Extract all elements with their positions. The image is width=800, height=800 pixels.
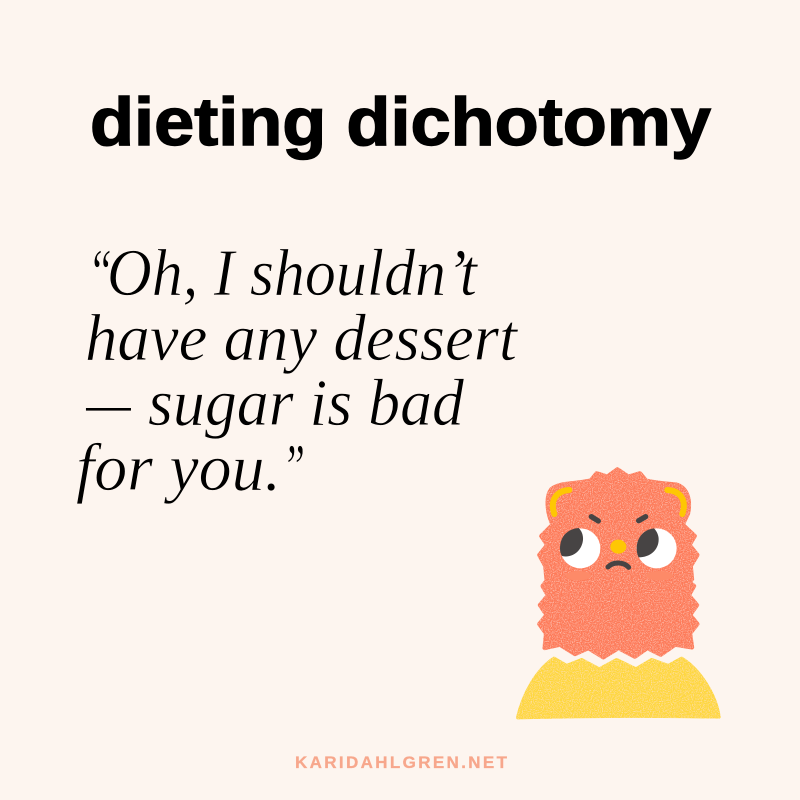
icon: grumpy orange monster — [518, 469, 719, 717]
monster orange fur — [539, 469, 697, 657]
quote text: have any dessert — [85, 301, 518, 375]
footer website: KARIDAHLGREN.NET — [295, 753, 508, 772]
quote text: sugar is bad — [148, 366, 464, 440]
monster yellow body — [518, 659, 719, 717]
quote text: Oh, I shouldn’t — [107, 236, 478, 310]
quote text: for you. — [76, 431, 281, 505]
nose — [610, 540, 626, 554]
quote text: ” — [282, 431, 305, 505]
quote text — [76, 236, 518, 505]
cheeks — [566, 571, 673, 580]
quote text: “ — [88, 236, 112, 310]
quote text: — — [85, 366, 131, 440]
left eye — [560, 528, 600, 568]
eyebrows — [591, 517, 646, 521]
title: dieting dichotomy — [90, 84, 711, 160]
ears — [553, 490, 684, 514]
mouth — [608, 563, 629, 567]
right eye — [637, 528, 677, 568]
